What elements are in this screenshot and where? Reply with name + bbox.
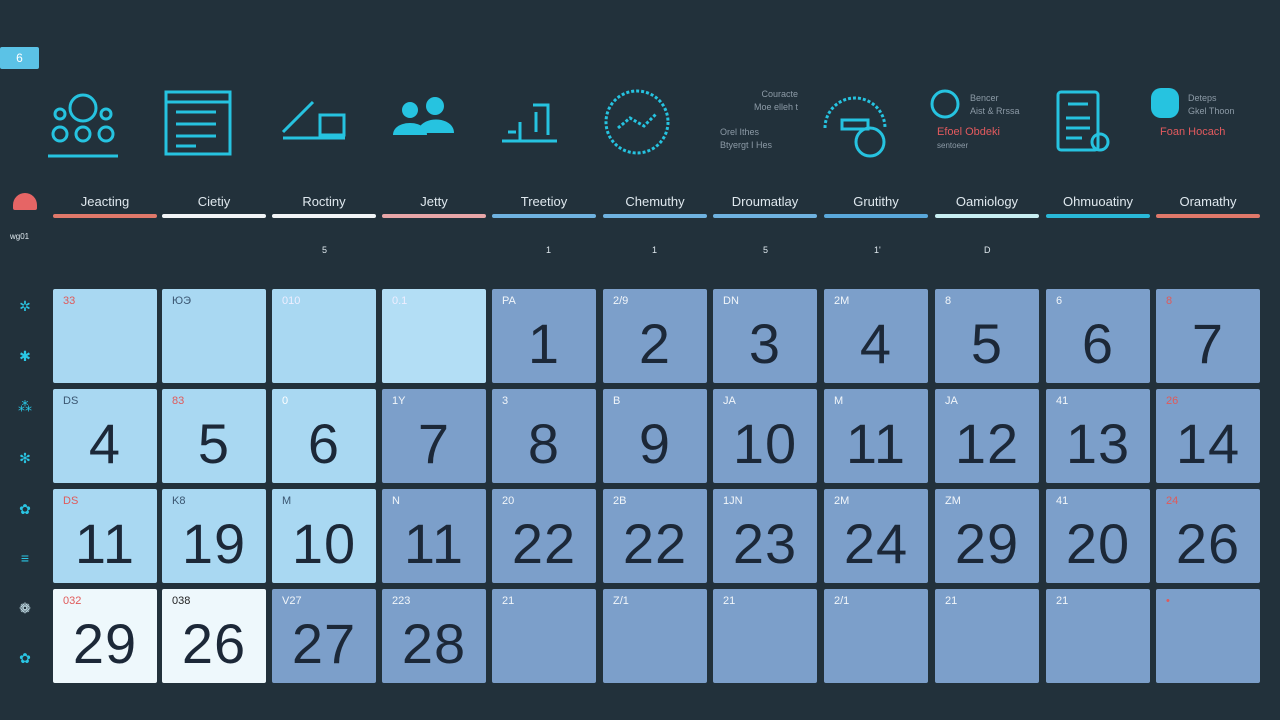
text: Bencer xyxy=(970,93,999,103)
left side icons: ≡ xyxy=(21,550,29,566)
left side icons: ❁ xyxy=(19,600,31,616)
calendar grid: 26 xyxy=(1166,395,1178,407)
calendar grid: ZM xyxy=(945,495,961,507)
calendar grid: 2/9 xyxy=(613,295,628,307)
icon: gauge xyxy=(825,98,885,128)
small text blocks in icon row: Moe elleh t xyxy=(754,102,798,112)
badge top-left xyxy=(0,47,39,69)
calendar grid: 14 xyxy=(1176,412,1240,475)
headers: Grutithy xyxy=(853,194,899,209)
calendar grid: 21 xyxy=(723,595,735,607)
calendar grid: 20 xyxy=(502,495,514,507)
calendar grid: 6 xyxy=(1056,295,1062,307)
calendar grid: 2/1 xyxy=(834,595,849,607)
calendar grid: 22 xyxy=(623,512,687,575)
calendar grid: 24 xyxy=(1166,495,1178,507)
calendar grid: 20 xyxy=(1066,512,1130,575)
calendar grid: 2 xyxy=(639,312,671,375)
calendar grid: 8 xyxy=(1166,295,1172,307)
text: sentoeer xyxy=(937,141,968,150)
headers: Treetioy xyxy=(521,194,567,209)
calendar grid: 12 xyxy=(955,412,1019,475)
headers: Cietiy xyxy=(198,194,230,209)
small marks row: 5 xyxy=(322,245,327,255)
calendar grid: 1JN xyxy=(723,495,743,507)
calendar grid: 11 xyxy=(75,512,135,575)
small marks row xyxy=(322,245,990,255)
icon: face badge xyxy=(932,91,958,117)
headers: Jetty xyxy=(420,194,448,209)
left side icons: ✿ xyxy=(19,650,31,666)
calendar grid: 11 xyxy=(846,412,906,475)
text: Aist & Rrssa xyxy=(970,106,1020,116)
calendar grid: 8 xyxy=(528,412,560,475)
headers: Ohmuoatiny xyxy=(1063,194,1133,209)
calendar grid: 27 xyxy=(292,612,356,675)
icon: people group xyxy=(48,95,118,156)
small marks row: 1 xyxy=(652,245,657,255)
headers: Droumatlay xyxy=(732,194,798,209)
calendar grid: V27 xyxy=(282,595,302,607)
calendar grid: 032 xyxy=(63,595,81,607)
calendar grid: M xyxy=(282,495,291,507)
headers xyxy=(53,194,1260,218)
left side icons: ✱ xyxy=(19,348,31,364)
calendar grid: 13 xyxy=(1066,412,1130,475)
icon: stairs xyxy=(502,105,557,141)
small marks row: D xyxy=(984,245,990,255)
calendar grid: M xyxy=(834,395,843,407)
calendar grid: 038 xyxy=(172,595,190,607)
calendar grid: 41 xyxy=(1056,395,1068,407)
icon: users xyxy=(393,97,454,135)
icon: refresh badge xyxy=(1151,88,1179,118)
calendar grid: 21 xyxy=(502,595,514,607)
text: Efoel Obdeki xyxy=(937,126,1000,138)
left side icons: ✻ xyxy=(19,450,31,466)
calendar grid xyxy=(53,289,1260,683)
calendar grid: 22 xyxy=(512,512,576,575)
calendar grid: • xyxy=(1166,595,1170,607)
calendar grid: 3 xyxy=(749,312,781,375)
calendar grid: 7 xyxy=(1192,312,1224,375)
small marks row: 1 xyxy=(546,245,551,255)
calendar grid: 41 xyxy=(1056,495,1068,507)
calendar grid: 7 xyxy=(418,412,450,475)
calendar grid: 28 xyxy=(402,612,466,675)
calendar grid: 24 xyxy=(844,512,908,575)
calendar grid: DS xyxy=(63,495,78,507)
icon: red dome xyxy=(13,193,37,210)
left side icons: ⁂ xyxy=(18,398,32,414)
calendar grid: 26 xyxy=(1176,512,1240,575)
small text blocks in icon row xyxy=(754,89,798,112)
headers: Jeacting xyxy=(81,194,129,209)
calendar grid: DS xyxy=(63,395,78,407)
calendar grid: 010 xyxy=(282,295,300,307)
calendar grid: 33 xyxy=(63,295,75,307)
calendar grid: 1 xyxy=(528,312,560,375)
left side icons: ✿ xyxy=(19,501,31,517)
calendar grid: 23 xyxy=(733,512,797,575)
calendar grid: 2B xyxy=(613,495,626,507)
headers: Chemuthy xyxy=(625,194,685,209)
small marks row: 1' xyxy=(874,245,881,255)
text: Foan Hocach xyxy=(1160,126,1225,138)
calendar grid: 3 xyxy=(502,395,508,407)
calendar grid: ЮЭ xyxy=(172,295,191,307)
calendar grid: 4 xyxy=(860,312,892,375)
headers: Oramathy xyxy=(1179,194,1237,209)
calendar grid: Z/1 xyxy=(613,595,629,607)
calendar grid: 223 xyxy=(392,595,410,607)
text: Orel Ithes xyxy=(720,127,759,137)
calendar grid: 83 xyxy=(172,395,184,407)
calendar grid: 8 xyxy=(945,295,951,307)
headers: Roctiny xyxy=(302,194,346,209)
calendar grid: B xyxy=(613,395,620,407)
calendar grid: 21 xyxy=(1056,595,1068,607)
calendar grid: 21 xyxy=(945,595,957,607)
text: Btyergt I Hes xyxy=(720,140,772,150)
calendar grid: 0 xyxy=(282,395,288,407)
calendar grid: K8 xyxy=(172,495,185,507)
small marks row: 5 xyxy=(763,245,768,255)
calendar grid: 10 xyxy=(292,512,356,575)
calendar grid: 5 xyxy=(971,312,1003,375)
headers: Oamiology xyxy=(956,194,1018,209)
calendar grid: 9 xyxy=(639,412,671,475)
icon row xyxy=(48,88,1179,158)
text: Gkel Thoon xyxy=(1188,106,1234,116)
calendar grid: 4 xyxy=(89,412,121,475)
calendar grid: 11 xyxy=(404,512,464,575)
text: Deteps xyxy=(1188,93,1217,103)
calendar grid: 10 xyxy=(733,412,797,475)
label left: wg01 xyxy=(10,232,29,241)
calendar grid: 29 xyxy=(73,612,137,675)
calendar grid: 6 xyxy=(1082,312,1114,375)
calendar grid: 29 xyxy=(955,512,1019,575)
calendar grid: N xyxy=(392,495,400,507)
icon: document xyxy=(166,92,230,154)
calendar grid: JA xyxy=(945,395,958,407)
calendar grid: 6 xyxy=(308,412,340,475)
small text blocks in icon row: Couracte xyxy=(761,89,798,99)
calendar grid: DN xyxy=(723,295,739,307)
left side icons xyxy=(18,298,32,666)
calendar grid: JA xyxy=(723,395,736,407)
badge top-left: 6 xyxy=(16,51,23,65)
icon: globe xyxy=(606,91,668,153)
calendar grid: 0.1 xyxy=(392,295,407,307)
calendar grid: 2M xyxy=(834,495,849,507)
icon: report xyxy=(1058,92,1108,150)
calendar grid: 2M xyxy=(834,295,849,307)
icon: chart xyxy=(283,102,345,138)
calendar grid: 19 xyxy=(182,512,246,575)
calendar grid: 1Y xyxy=(392,395,405,407)
calendar grid: PA xyxy=(502,295,516,307)
calendar grid: 5 xyxy=(198,412,230,475)
calendar grid: 26 xyxy=(182,612,246,675)
left side icons: ✲ xyxy=(19,298,31,314)
